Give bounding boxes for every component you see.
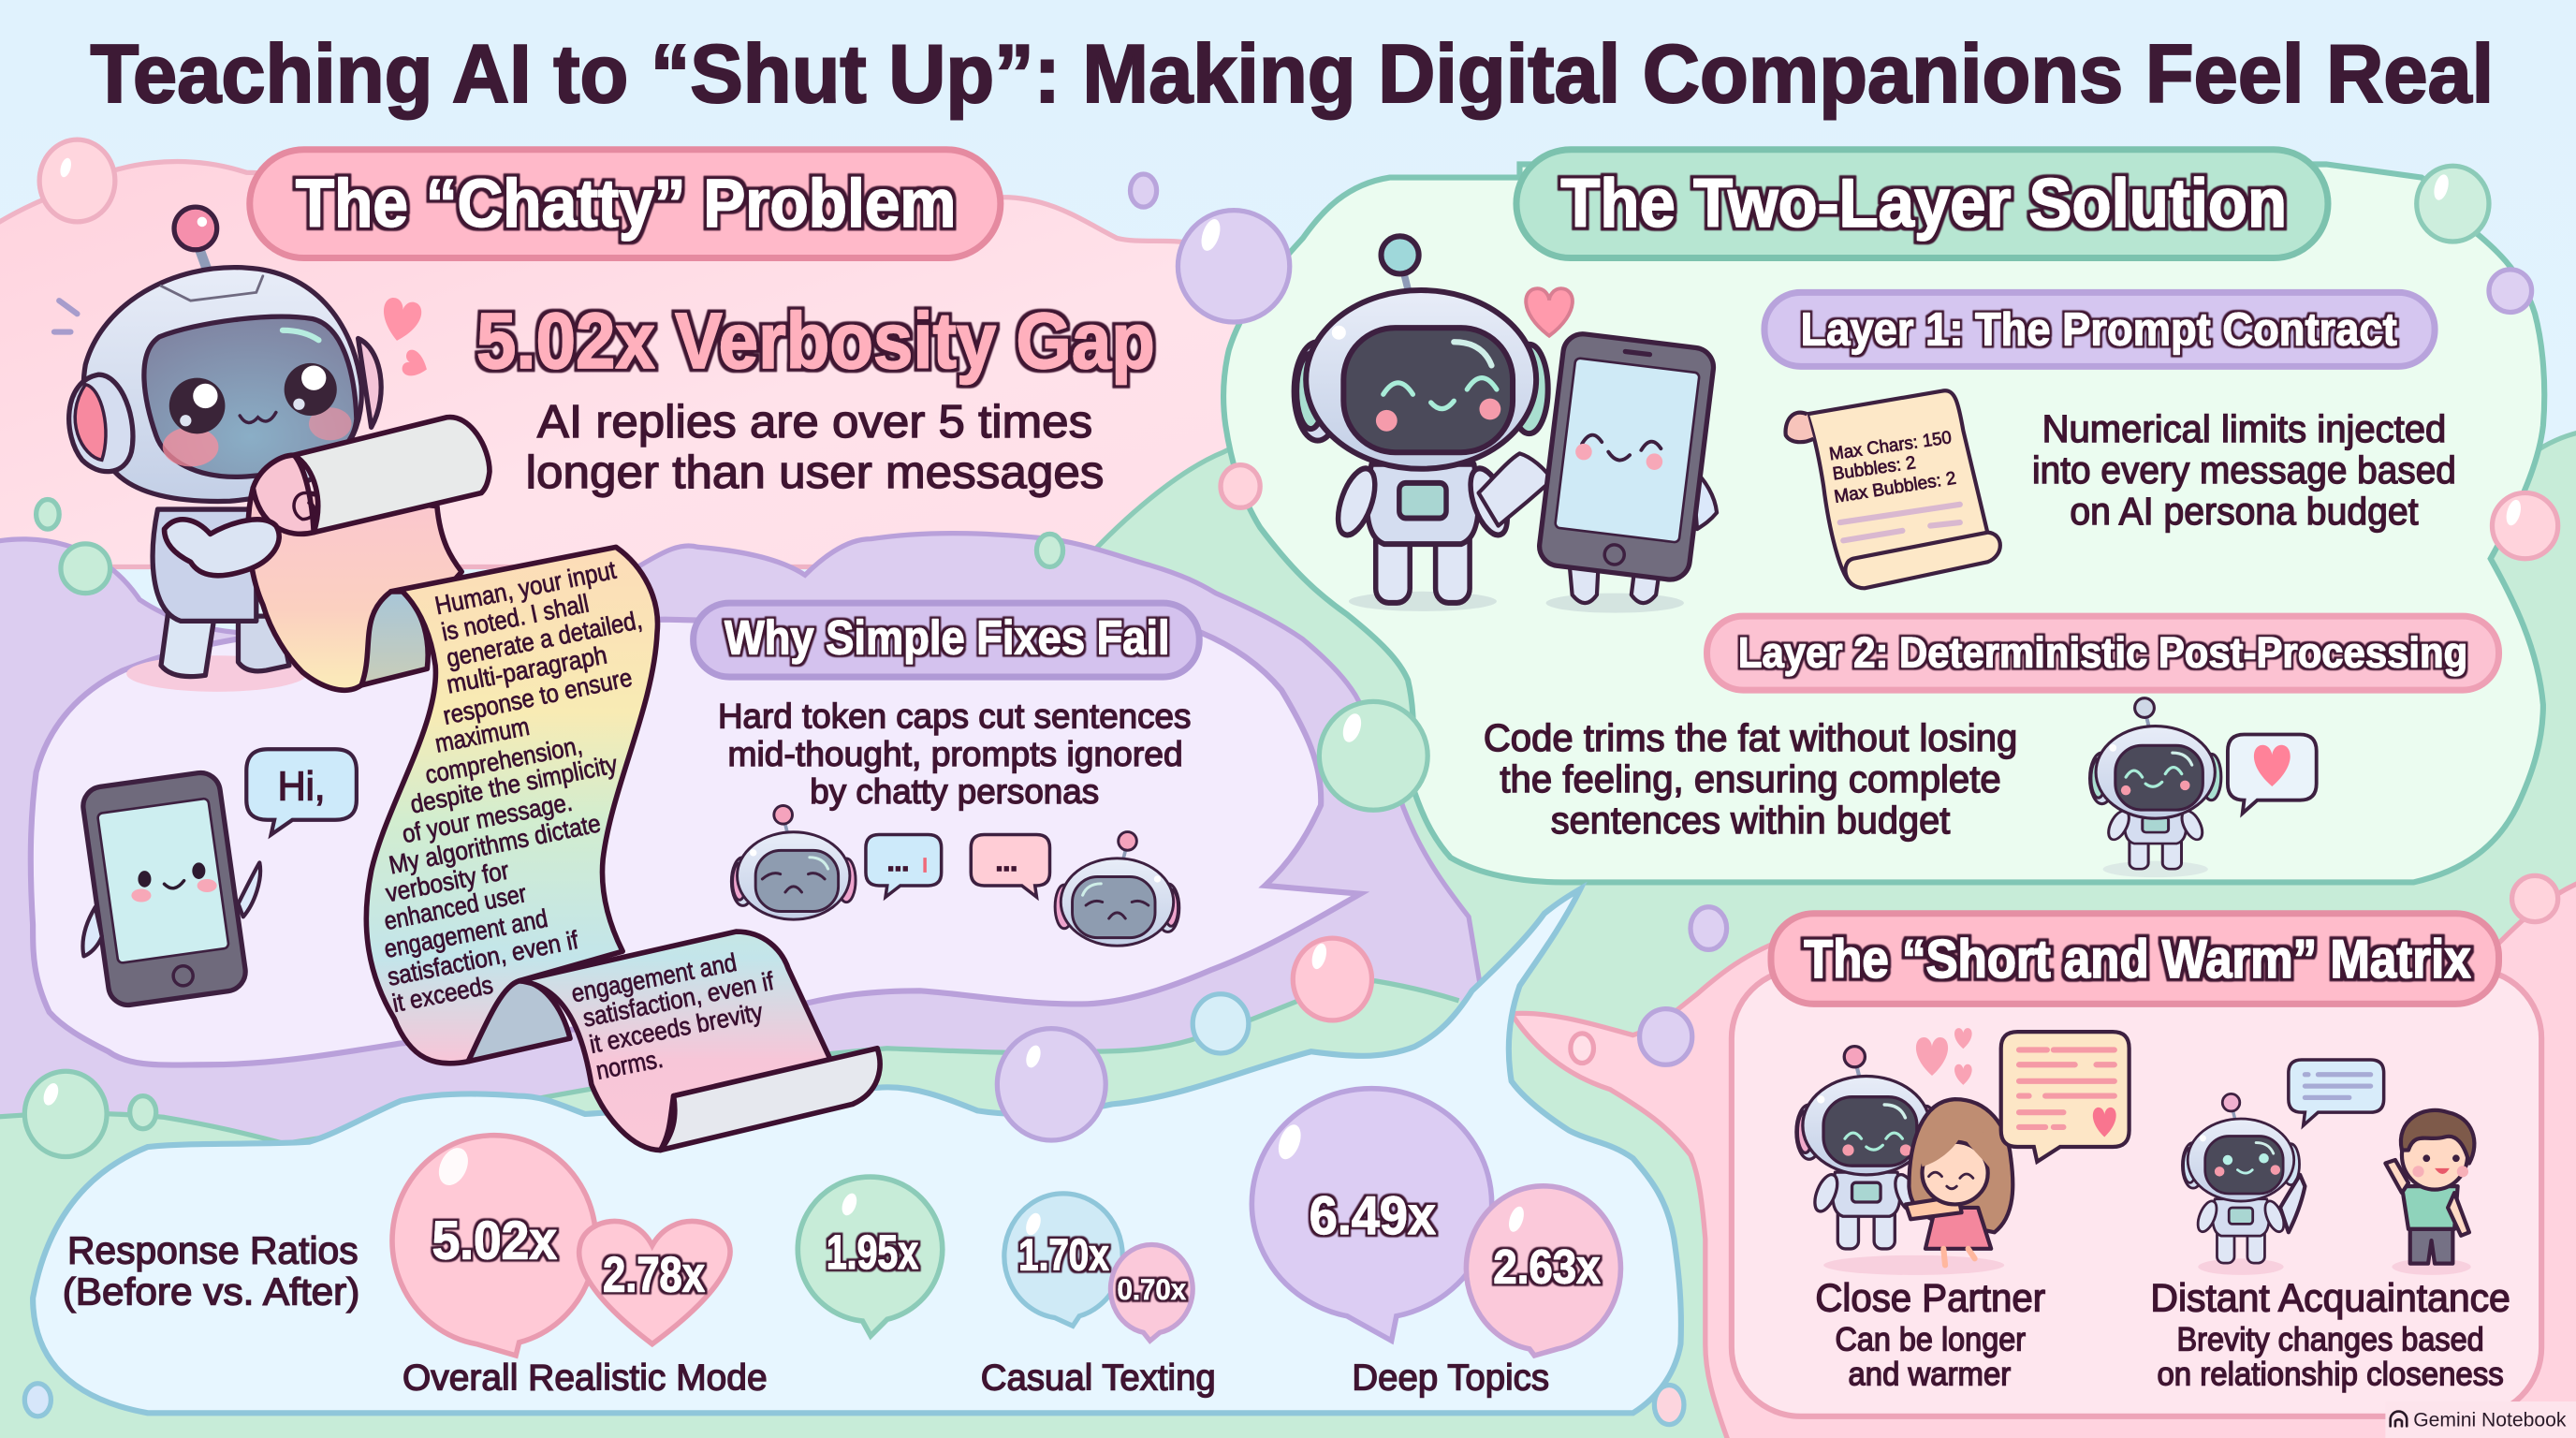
text: numerical limits [2032,407,2456,533]
pink problem zone backdrop [0,162,1298,566]
text: code trims [1484,716,2017,842]
robot shadow [126,655,307,692]
scroll text: of your message. [400,787,575,848]
phone face [131,862,217,902]
green lower edge line [0,981,1459,1143]
heading pill: layer 1 [1764,292,2435,366]
text: code trims: Code trims the fat without losing [1484,716,2017,759]
scroll text: enhanced user [381,878,529,935]
text: code trims: the feeling, ensuring complete [1500,757,2001,800]
phone feet [1569,559,1660,603]
scroll text: engagement and [382,903,550,963]
scroll text: multi-paragraph [444,640,609,699]
text: distant acquaintance: Brevity changes based [2177,1322,2484,1358]
text: close partner [1815,1276,2045,1392]
label: Casual Texting [981,1358,1216,1399]
scroll text: comprehension, [423,730,585,789]
bubble: 1.70x before: 1.70x [1018,1231,1109,1281]
text: distant acquaintance: on relationship closeness [2157,1356,2504,1392]
hearts and motion marks [54,296,431,382]
label: Deep Topics [1352,1358,1549,1399]
hearts [1916,1028,1972,1085]
heading pill: layer 2: Layer 2: Deterministic Post-Processing [1738,629,2467,677]
sad robots with speech bubbles [731,805,1179,946]
scroll limits text: Bubbles: 2 [1831,453,1917,484]
robot face [1376,378,1500,432]
chart: 1.95x bubble [798,1177,943,1336]
character: small robot with heart bubble [2090,698,2317,877]
robot face [163,363,352,466]
text: code trims: sentences within budget [1551,799,1950,842]
scroll top roll [294,418,490,533]
scroll lower fold [468,981,570,1062]
robot arm to phone [1479,453,1553,526]
text: verbosity explanation: longer than user messages [526,448,1104,498]
scroll text: Human, your input [432,555,619,620]
chart: 1.95x bubble: 1.95x [827,1225,918,1279]
heading pill: why simple fixes fail [694,603,1199,677]
heading pill: layer 2 [1707,616,2499,690]
text: numerical limits: into every message based [2032,448,2456,492]
scroll back strip [248,488,461,690]
bubble: 5.02x before: 5.02x [432,1211,557,1270]
scroll text [381,555,776,1085]
text: distant acquaintance [2150,1276,2510,1392]
text: response ratios label [63,1229,359,1313]
scroll text: satisfaction, even if [580,966,776,1033]
bubble: 2.78x after: 2.78x [603,1247,705,1302]
hi speech bubble [246,749,357,835]
blue ellipsis bubble [866,835,942,897]
robot legs and body [153,509,289,677]
scroll text: My algorithms dictate [387,808,603,880]
watermark: gemini notebook [2385,1401,2576,1438]
pink ellipsis bubble [971,835,1050,897]
text: verbosity explanation [526,397,1104,498]
text: close partner: and warmer [1848,1356,2012,1392]
text: why fixes fail [718,697,1191,811]
right ear [359,339,381,427]
scroll bottom roll [661,1049,880,1151]
text: verbosity explanation: AI replies are over 5 times [537,397,1092,448]
helmet [83,268,361,501]
scroll curl [253,455,314,534]
bubble: 6.49x before [1251,1089,1492,1341]
panel: short and warm matrix [1732,914,2541,1416]
label: Overall Realistic Mode [402,1358,768,1399]
bubble: 0.70x after [1110,1245,1193,1341]
character: phone saying hi [80,749,357,1007]
character: phone saying hi: Hi, [278,764,326,810]
scroll text: response to ensure [441,663,635,730]
scroll text: generate a detailed, [444,605,645,672]
scroll limits text: Max Chars: 150 [1828,428,1953,464]
text: distant acquaintance: Distant Acquaintance [2150,1276,2510,1320]
bubble: 5.02x before [392,1136,596,1356]
text: response ratios label: Response Ratios [67,1229,359,1272]
character: chatty robot [54,207,431,692]
scroll limits text [1828,428,1957,507]
phone wings [238,862,260,917]
robot arm on scroll [165,520,279,576]
bubble: 1.70x before [1004,1194,1122,1326]
sad robots with speech bubbles: ... [996,847,1017,876]
title: Teaching AI to “Shut Up”: Making Digital Companions Feel Real [91,28,2494,120]
icon: prompt contract scroll [1786,390,2000,588]
heart [1526,288,1573,336]
panel: matrix pink backdrop [1512,879,2576,1438]
left ear [69,374,133,472]
chart: overall realistic mode bubbles [392,1136,768,1399]
text: why fixes fail: Hard token caps cut sentences [718,697,1191,735]
heading pill: the chatty problem: The “Chatty” Problem [296,167,956,242]
visor [144,316,357,477]
heading pill: the two-layer solution: The Two-Layer Solution [1560,164,2287,242]
giant scroll [165,418,880,1151]
boy [2385,1110,2474,1264]
phone body [80,770,248,1007]
scroll lower sheet [520,932,831,1151]
phone body [1537,331,1716,581]
scroll text: it exceeds brevity [587,997,766,1059]
small cool speech bubble [2289,1060,2384,1125]
heading pill: short and warm matrix: The “Short and Warm” Matrix [1804,930,2471,990]
scroll text: satisfaction, even if [385,925,581,991]
character: robot hugging partner [1796,1028,2130,1275]
heart bubble [2228,734,2317,814]
warm long speech bubble [2001,1032,2130,1162]
scroll text: maximum [432,712,532,758]
panel: response ratios background [33,888,1681,1413]
purple backdrop [0,534,1480,1151]
character: happy robot with phone [1295,236,1717,613]
heading pill: short and warm matrix [1771,914,2499,1004]
scroll front sheet [366,547,657,1064]
scroll text: engagement and [569,947,739,1007]
text: close partner: Close Partner [1815,1276,2045,1320]
panel: two-layer solution background [1223,165,2544,882]
green upper backdrop [1092,246,2576,1438]
scroll text: norms. [593,1044,666,1085]
scroll text: it exceeds [389,970,495,1018]
text: close partner: Can be longer [1835,1322,2026,1358]
heading pill: the chatty problem [250,150,1001,258]
scroll limits text: Max Bubbles: 2 [1833,469,1957,507]
character: robot and distant acquaintance [2182,1060,2474,1275]
heading pill: the two-layer solution [1516,150,2328,258]
phone face [1575,435,1662,470]
panel: why simple fixes fail background [31,620,1360,1065]
chart: deep topics bubbles [1251,1089,1620,1399]
bubble: 2.63x after: 2.63x [1493,1240,1600,1294]
stat: verbosity gap: 5.02x Verbosity Gap [476,297,1155,385]
sad robots with speech bubbles: ... [887,847,909,876]
scroll text: is noted. I shall [439,588,592,646]
bubble: 0.70x after: 0.70x [1117,1272,1187,1306]
scroll fold [361,592,428,685]
text: numerical limits: on AI persona budget [2070,490,2419,533]
antenna [174,207,217,270]
bubble: 6.49x before: 6.49x [1310,1186,1436,1246]
bubble: 2.63x after [1466,1186,1620,1356]
text: numerical limits: Numerical limits injected [2042,407,2446,450]
text: why fixes fail: by chatty personas [810,772,1099,811]
text: response ratios label: (Before vs. After) [63,1269,359,1313]
bubble: 2.78x after [579,1221,730,1344]
watermark: gemini notebook: Gemini Notebook [2413,1409,2567,1431]
heading pill: why simple fixes fail: Why Simple Fixes Fail [724,611,1170,665]
scroll text: verbosity for [383,856,511,907]
chart: casual texting bubbles [981,1194,1216,1399]
text: why fixes fail: mid-thought, prompts ignored [728,735,1183,773]
heading pill: layer 1: Layer 1: The Prompt Contract [1801,305,2397,356]
girl [1906,1099,2012,1265]
scroll text: despite the simplicity [408,749,620,819]
green lower backdrop [0,981,1741,1438]
